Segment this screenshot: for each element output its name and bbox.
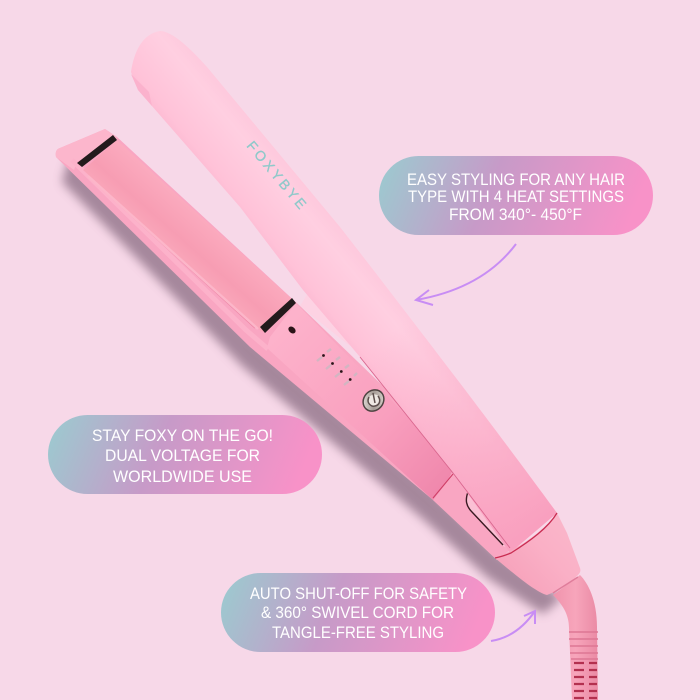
- hinge slot: [466, 488, 509, 547]
- lower arm tip: [56, 129, 117, 170]
- ceramic plate: [83, 140, 296, 332]
- arrow: heat settings: [416, 244, 516, 305]
- black bar bottom: [260, 298, 296, 333]
- callout: dual voltage: STAY FOXY ON THE GO!: [92, 427, 273, 445]
- callout: auto shut-off: [221, 573, 495, 652]
- black bar top: [77, 135, 117, 167]
- callout: dual voltage: WORLDWIDE USE: [113, 468, 252, 486]
- collar: [495, 513, 580, 595]
- power button: [358, 385, 389, 416]
- callout: auto shut-off: TANGLE-FREE STYLING: [272, 624, 444, 642]
- callout: heat settings: [379, 156, 653, 235]
- control panel: [267, 303, 455, 500]
- indicator dot: [287, 325, 297, 335]
- lower arm: [56, 129, 510, 560]
- brand name: FOXYBYE: [244, 138, 312, 214]
- arrow: auto shut-off: [491, 611, 535, 641]
- hinge section: [433, 473, 510, 560]
- heat setting indicators: [317, 349, 357, 385]
- callout: heat settings: EASY STYLING FOR ANY HAIR: [407, 171, 625, 189]
- upper arm: [131, 31, 557, 553]
- callout: heat settings: TYPE WITH 4 HEAT SETTINGS: [408, 188, 624, 206]
- callout: dual voltage: DUAL VOLTAGE FOR: [105, 447, 260, 465]
- callout: auto shut-off: & 360° SWIVEL CORD FOR: [261, 604, 454, 622]
- callout: auto shut-off: AUTO SHUT-OFF FOR SAFETY: [250, 585, 467, 603]
- frame highlight: [72, 160, 268, 349]
- callout: dual voltage: [48, 415, 322, 494]
- flat iron: [56, 31, 598, 700]
- callout: heat settings: FROM 340°- 450°F: [449, 206, 582, 224]
- gap between arms: [300, 293, 350, 346]
- flat iron shadow: [62, 155, 562, 614]
- cord: [553, 575, 598, 700]
